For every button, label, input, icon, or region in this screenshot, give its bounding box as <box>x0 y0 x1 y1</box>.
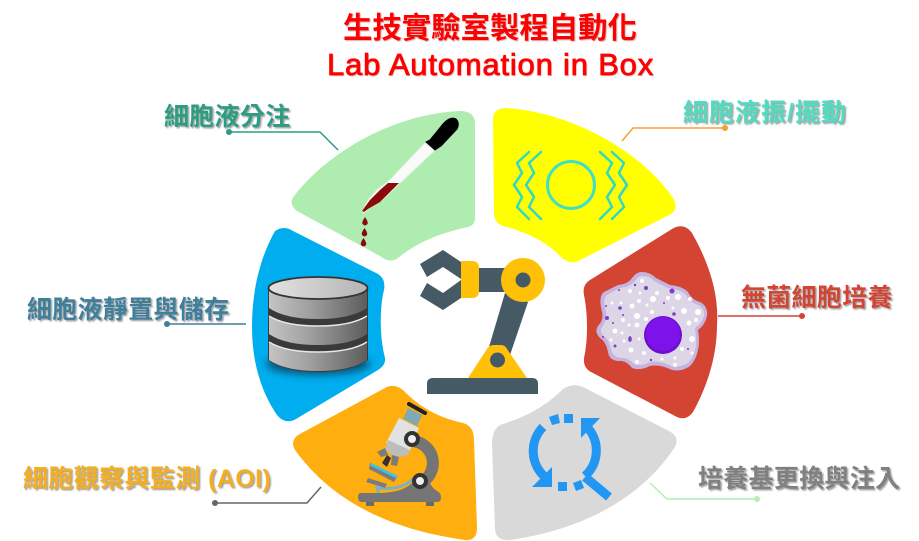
title: English: Lab Automation in Box <box>327 47 654 82</box>
sector: gray <box>492 385 677 540</box>
panel: cell dispensing <box>292 111 475 261</box>
icon: microscope <box>358 404 441 506</box>
icon: cell <box>596 272 707 370</box>
connector: storage <box>164 321 246 327</box>
icon: robot arm <box>420 250 545 394</box>
label: culture: 無菌細胞培養 <box>741 284 893 312</box>
connector: culture <box>718 313 805 319</box>
icon: database <box>266 277 370 375</box>
icon: dropper <box>361 118 458 246</box>
icon: vibrating circle <box>514 152 627 219</box>
panel: sterile culture <box>584 226 717 418</box>
connector: shaking <box>622 125 728 141</box>
icon: exchange arrows <box>532 414 609 497</box>
sector: orange <box>293 386 477 540</box>
panel: storage <box>252 228 385 421</box>
label: observation: 細胞觀察與監測 (AOI) <box>23 465 271 493</box>
sector: green <box>292 111 475 261</box>
connector: exchange <box>650 483 760 502</box>
label: storage: 細胞液靜置與儲存 <box>27 296 229 324</box>
sector: red <box>584 226 717 418</box>
label: shaking: 細胞液振/擺動 <box>683 99 847 127</box>
label: dispensing: 細胞液分注 <box>164 103 291 131</box>
sector: yellow <box>493 108 676 262</box>
title: Chinese: 生技實驗室製程自動化 <box>343 12 637 45</box>
sector: blue <box>252 228 385 421</box>
panel: observation <box>293 386 477 540</box>
connector: observation <box>212 487 321 506</box>
label: exchange: 培養基更換與注入 <box>698 465 900 493</box>
connector: dispensing <box>226 129 338 150</box>
panel: shaking <box>493 108 676 262</box>
panel: medium exchange <box>492 385 677 540</box>
